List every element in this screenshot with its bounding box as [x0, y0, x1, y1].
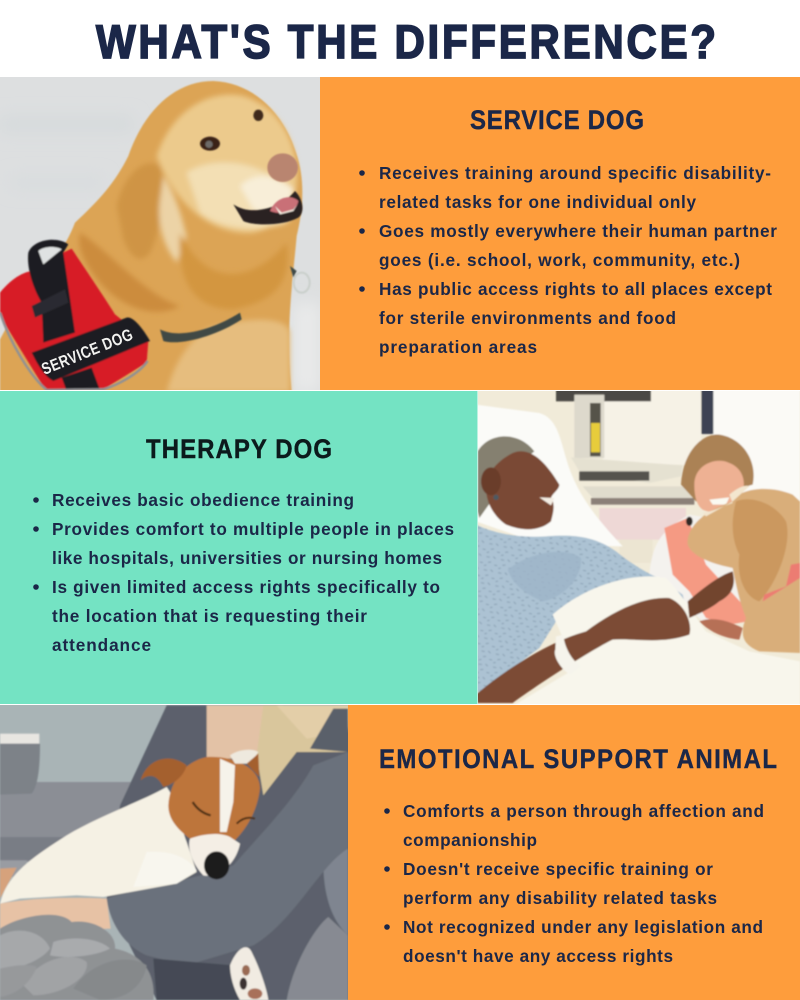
list: emotional support animal facts	[384, 801, 764, 966]
list: service dog facts: preparation areas	[379, 337, 537, 357]
list: service dog facts	[359, 163, 777, 357]
sweater	[107, 705, 350, 1000]
nurse	[649, 515, 753, 621]
list: therapy dog facts: Provides comfort to multiple people in places	[52, 519, 454, 539]
blanket	[0, 915, 154, 1000]
list: service dog facts: Goes mostly everywhere their human partner	[379, 221, 777, 241]
patient arm	[476, 598, 690, 703]
list: service dog facts: Receives training around specific disability-	[379, 163, 771, 183]
list: emotional support animal facts: Doesn't receive specific training or	[403, 859, 713, 879]
photo: patient and therapy dog in hospital	[478, 391, 800, 704]
nurse arm and hand	[688, 571, 734, 618]
patient gown	[476, 525, 686, 693]
photo: golden retriever in service dog vest	[0, 77, 320, 390]
list: therapy dog facts: Receives basic obedience training	[52, 490, 354, 510]
list: emotional support animal facts: Not recognized under any legislation and	[403, 917, 763, 937]
dog head	[168, 757, 260, 842]
dog	[688, 489, 800, 653]
list: service dog facts: goes (i.e. school, work, community, etc.)	[379, 250, 740, 270]
heading: therapy dog: THERAPY DOG	[146, 435, 332, 464]
list: therapy dog facts: Is given limited access rights specifically to	[52, 577, 440, 597]
list: service dog facts: related tasks for one individual only	[379, 192, 696, 212]
list: therapy dog facts: the location that is requesting their	[52, 606, 367, 626]
panel: service dog	[320, 77, 800, 390]
list: therapy dog facts: like hospitals, universities or nursing homes	[52, 548, 442, 568]
blanket	[513, 576, 800, 706]
list: therapy dog facts: attendance	[52, 635, 151, 655]
patient head	[478, 436, 534, 518]
panel: emotional support animal	[348, 705, 800, 1000]
list: emotional support animal facts: perform any disability related tasks	[403, 888, 717, 908]
bed pillow	[476, 405, 623, 546]
skin arm	[0, 898, 111, 932]
heading: service dog: SERVICE DOG	[470, 106, 644, 135]
vest	[0, 249, 148, 392]
title: WHAT'S THE DIFFERENCE?	[96, 16, 716, 69]
list: emotional support animal facts: companionship	[403, 830, 537, 850]
list: emotional support animal facts: doesn't have any access rights	[403, 946, 673, 966]
heading: emotional support animal: EMOTIONAL SUPPORT ANIMAL	[379, 745, 777, 774]
list: service dog facts: for sterile environments and food	[379, 308, 676, 328]
photo: sleeping dog held by a woman	[0, 705, 348, 1000]
eyes and nose	[200, 137, 220, 151]
vest label: SERVICE DOG	[39, 325, 136, 379]
dog body	[0, 787, 197, 904]
panel: therapy dog	[0, 391, 478, 704]
collar	[160, 313, 242, 342]
list: emotional support animal facts: Comforts a person through affection and	[403, 801, 764, 821]
list: service dog facts: Has public access rights to all places except	[379, 279, 772, 299]
list: therapy dog facts	[33, 490, 454, 655]
dog paw	[230, 947, 268, 1000]
